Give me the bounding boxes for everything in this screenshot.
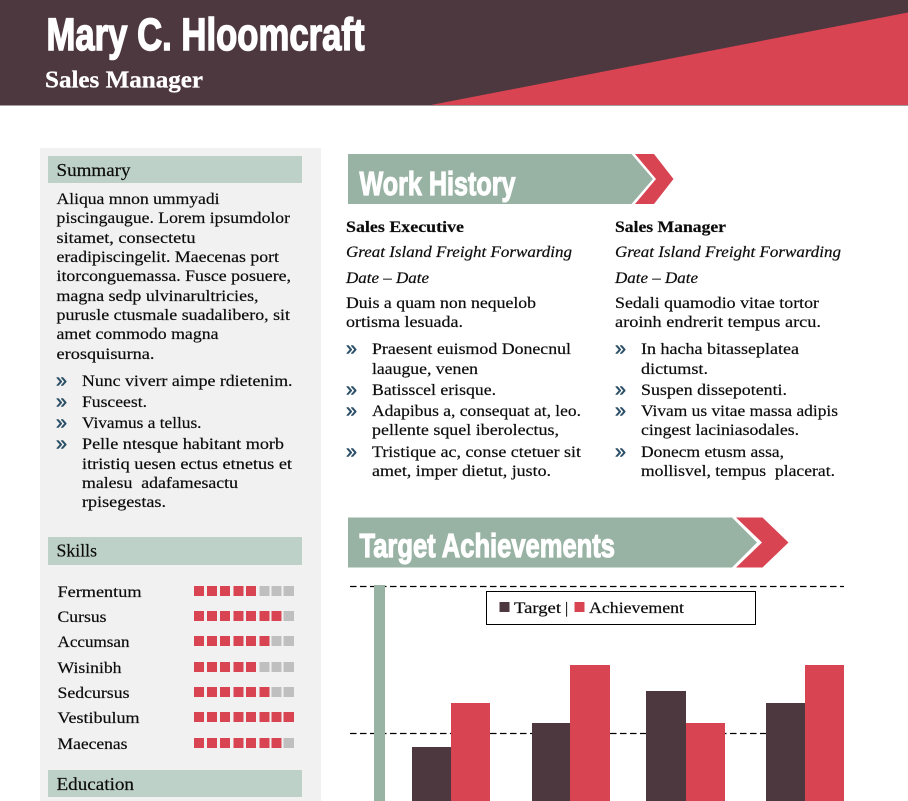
summary bullet list [56,370,293,511]
job title: Sales Manager [45,68,203,94]
summary text: eradipiscingelit. Maecenas port [56,249,280,266]
job entry: sales manager: In hacha bitasseplatea [641,341,799,358]
job entry: sales manager: Sales Manager [615,219,726,236]
skills rating list: Fermentum [58,584,142,601]
heading: summary: Summary [56,160,130,180]
summary bullet list: » [56,391,67,413]
job entry: sales executive: Praesent euismod Donecnul [372,341,572,358]
summary bullet list: malesu adafamesactu [82,475,238,492]
summary text: purusle ctusmale suadalibero, sit [56,307,291,324]
name title: Mary C. Hloomcraft [46,9,365,60]
job entry: sales manager: » [615,400,626,422]
job entry: sales executive: Batisscel erisque. [372,382,496,399]
chart legend [486,592,756,624]
job entry: sales manager: cingest laciniasodales. [641,422,799,439]
job entry: sales manager: » [615,379,626,401]
heading arrow: target achievements [348,518,788,568]
summary bullet list: itristiq uesen ectus etnetus et [82,456,293,473]
heading arrow: work history [348,154,674,204]
job entry: sales executive: » [346,400,357,422]
job entry: sales executive: Date – Date [345,270,429,287]
job entry: sales manager: Vivam us vitae massa adipis [641,403,838,420]
skills rating list: Sedcursus [58,685,130,702]
job entry: sales executive [345,219,582,480]
heading: education [48,770,302,797]
job entry: sales manager: Great Island Freight Forwarding [615,244,841,261]
header banner [0,0,908,106]
summary bullet list: Fusceest. [82,394,147,411]
job entry: sales manager: » [615,338,626,360]
heading: skills [48,537,302,565]
summary text: sitamet, consectetu [56,230,196,247]
job entry: sales manager [614,219,841,480]
heading arrow: work history: Work History [360,165,516,202]
job entry: sales manager: Sedali quamodio vitae tortor [615,295,820,312]
job entry: sales executive: » [346,338,357,360]
job entry: sales manager: aroinh endrerit tempus arcu. [615,314,821,331]
job entry: sales executive: Duis a quam non nequelob [346,295,536,312]
job entry: sales executive: amet, imper dietut, justo. [372,463,551,480]
chart legend: Achievement [589,600,685,617]
job entry: sales executive: Sales Executive [346,219,464,236]
panel: sidebar [40,148,321,801]
heading: skills: Skills [56,540,97,560]
heading arrow: target achievements: Target Achievements [360,527,615,564]
summary bullet list: Pelle ntesque habitant morb [82,436,284,453]
bar chart: target vs achievement [350,585,844,801]
job entry: sales executive: ortisma lesuada. [346,314,463,331]
skills rating list [58,584,294,753]
skills rating list: Cursus [58,609,106,626]
job entry: sales executive: » [346,441,357,463]
job entry: sales manager: Donecm etusm assa, [641,444,784,461]
job entry: sales manager: Date – Date [614,270,698,287]
skills rating list: Accumsan [58,634,130,651]
job entry: sales executive: Adapibus a, consequat at, leo. [372,403,581,420]
job entry: sales manager: mollisvel, tempus placerat. [641,463,835,480]
skills rating list: Vestibulum [58,710,140,727]
summary bullet list: » [56,412,67,434]
summary bullet list: rpisegestas. [82,494,166,511]
job entry: sales manager: » [615,441,626,463]
job entry: sales executive: pellente squel iberolectus, [372,422,559,439]
heading: education: Education [56,774,134,794]
skills rating list: Maecenas [58,736,128,753]
summary text: erosquisurna. [56,346,154,363]
skills rating list: Wisinibh [58,660,122,677]
summary text: piscingaugue. Lorem ipsumdolor [56,210,291,227]
summary text: itorconguemassa. Fusce posuere, [56,268,291,285]
job entry: sales executive: Tristique ac, conse ctetuer sit [372,444,582,461]
job entry: sales manager: Suspen dissepotenti. [641,382,787,399]
summary text: magna sedp ulvinarultricies, [56,288,258,305]
summary bullet list: Vivamus a tellus. [82,415,202,432]
chart legend: | [565,600,568,617]
chart legend: Target [514,600,562,617]
summary text: amet commodo magna [56,326,218,343]
summary bullet list: Nunc viverr aimpe rdietenim. [82,373,292,390]
job entry: sales executive: » [346,379,357,401]
job entry: sales executive: Great Island Freight Forwarding [346,244,572,261]
summary bullet list: » [56,433,67,455]
heading: summary [48,156,302,183]
summary text [56,191,291,363]
summary bullet list: » [56,370,67,392]
job entry: sales manager: dictumst. [641,361,708,378]
job entry: sales executive: laaugue, venen [372,361,478,378]
summary text: Aliqua mnon ummyadi [56,191,220,208]
